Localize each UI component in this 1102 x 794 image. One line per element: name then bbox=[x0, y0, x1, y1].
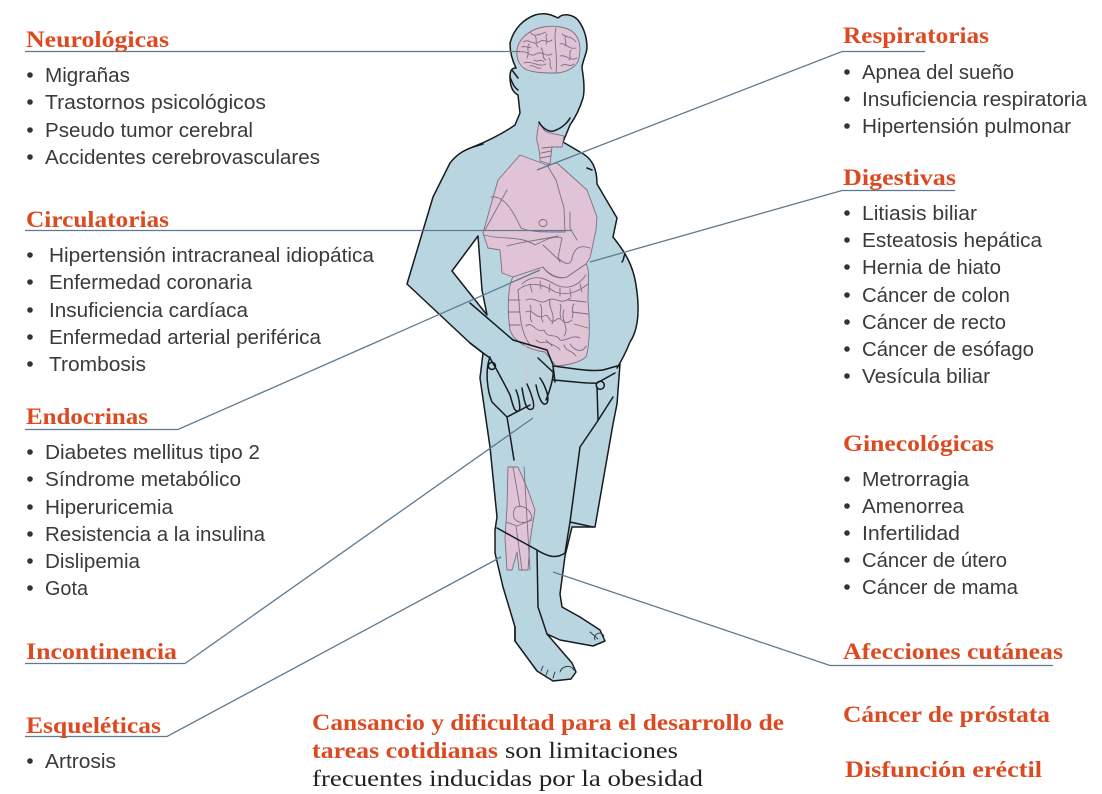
list: Gota bbox=[45, 578, 89, 600]
list: Cáncer de colon bbox=[862, 285, 1010, 307]
heading: incontinencia: Incontinencia bbox=[26, 639, 178, 664]
brain bbox=[517, 26, 580, 73]
list: Artrosis bbox=[45, 751, 116, 773]
list: Metrorragia bbox=[862, 469, 970, 491]
list: Cáncer de recto bbox=[862, 312, 1006, 334]
heading: afecciones cutáneas: Afecciones cutáneas bbox=[843, 639, 1063, 664]
list: Litiasis biliar bbox=[862, 203, 977, 225]
lungs, liver and stomach bbox=[483, 155, 597, 278]
list: Hernia de hiato bbox=[862, 257, 1001, 279]
list bbox=[844, 469, 1019, 599]
heading: Ginecológicas bbox=[843, 431, 994, 456]
panel: esqueléticas bbox=[26, 713, 161, 773]
panel: neurológicas bbox=[26, 27, 320, 169]
list: Insuficiencia cardíaca bbox=[49, 300, 249, 322]
list: Síndrome metabólico bbox=[45, 469, 241, 491]
list: Hipertensión pulmonar bbox=[862, 116, 1071, 138]
callout: limitaciones cotidianas: tareas cotidianas bbox=[312, 738, 498, 763]
intestines bbox=[508, 264, 589, 420]
list bbox=[844, 203, 1043, 388]
panel: endocrinas bbox=[26, 404, 266, 600]
human figure illustration bbox=[407, 14, 638, 681]
list: Insuficiencia respiratoria bbox=[862, 89, 1088, 111]
list bbox=[27, 245, 375, 376]
list: Trombosis bbox=[49, 354, 146, 376]
list bbox=[844, 62, 1088, 138]
list: Hiperuricemia bbox=[45, 497, 174, 519]
list: Trastornos psicológicos bbox=[45, 92, 266, 114]
callout: limitaciones cotidianas bbox=[312, 710, 784, 791]
list: Enfermedad coronaria bbox=[49, 272, 253, 294]
body silhouette bbox=[407, 14, 638, 681]
list: Diabetes mellitus tipo 2 bbox=[45, 442, 260, 464]
list: Cáncer de útero bbox=[862, 550, 1007, 572]
callout: limitaciones cotidianas: son limitaciones bbox=[505, 738, 678, 763]
trachea and throat bbox=[537, 122, 564, 164]
heading: disfunción eréctil: Disfunción eréctil bbox=[845, 757, 1042, 782]
toes bbox=[541, 632, 604, 678]
list bbox=[27, 65, 320, 169]
list bbox=[27, 442, 266, 600]
heading: Respiratorias bbox=[843, 23, 989, 48]
knee joint and leg bones bbox=[505, 467, 535, 570]
list: Migrañas bbox=[45, 65, 130, 87]
list: Accidentes cerebrovasculares bbox=[45, 147, 320, 169]
list: Dislipemia bbox=[45, 551, 141, 573]
gap between arm and torso bbox=[452, 236, 487, 315]
callout: limitaciones cotidianas: frecuentes inducidas por la obesidad bbox=[312, 766, 704, 791]
list: Infertilidad bbox=[862, 523, 960, 545]
heading: Endocrinas bbox=[26, 404, 148, 429]
list: Esteatosis hepática bbox=[862, 230, 1043, 252]
heading: Esqueléticas bbox=[26, 713, 161, 738]
heading: Neurológicas bbox=[26, 27, 169, 52]
list: Cáncer de esófago bbox=[862, 339, 1034, 361]
panel: respiratorias bbox=[843, 23, 1088, 138]
list: Vesícula biliar bbox=[862, 366, 990, 388]
clothing and body outlines bbox=[470, 70, 625, 678]
panel: ginecológicas bbox=[843, 431, 1019, 599]
panel: digestivas bbox=[843, 165, 1043, 388]
heading: Digestivas bbox=[843, 165, 956, 190]
callout: limitaciones cotidianas: Cansancio y dificultad para el desarrollo de bbox=[312, 710, 784, 735]
list: Cáncer de mama bbox=[862, 577, 1019, 599]
list: Resistencia a la insulina bbox=[45, 524, 266, 546]
list: Hipertensión intracraneal idiopática bbox=[49, 245, 375, 267]
panel: circulatorias bbox=[26, 207, 375, 376]
list: Amenorrea bbox=[862, 496, 965, 518]
heading: cáncer de próstata: Cáncer de próstata bbox=[843, 702, 1051, 727]
list: Pseudo tumor cerebral bbox=[45, 120, 253, 142]
list: Apnea del sueño bbox=[862, 62, 1014, 84]
heading: Circulatorias bbox=[26, 207, 169, 232]
list: Enfermedad arterial periférica bbox=[49, 327, 322, 349]
